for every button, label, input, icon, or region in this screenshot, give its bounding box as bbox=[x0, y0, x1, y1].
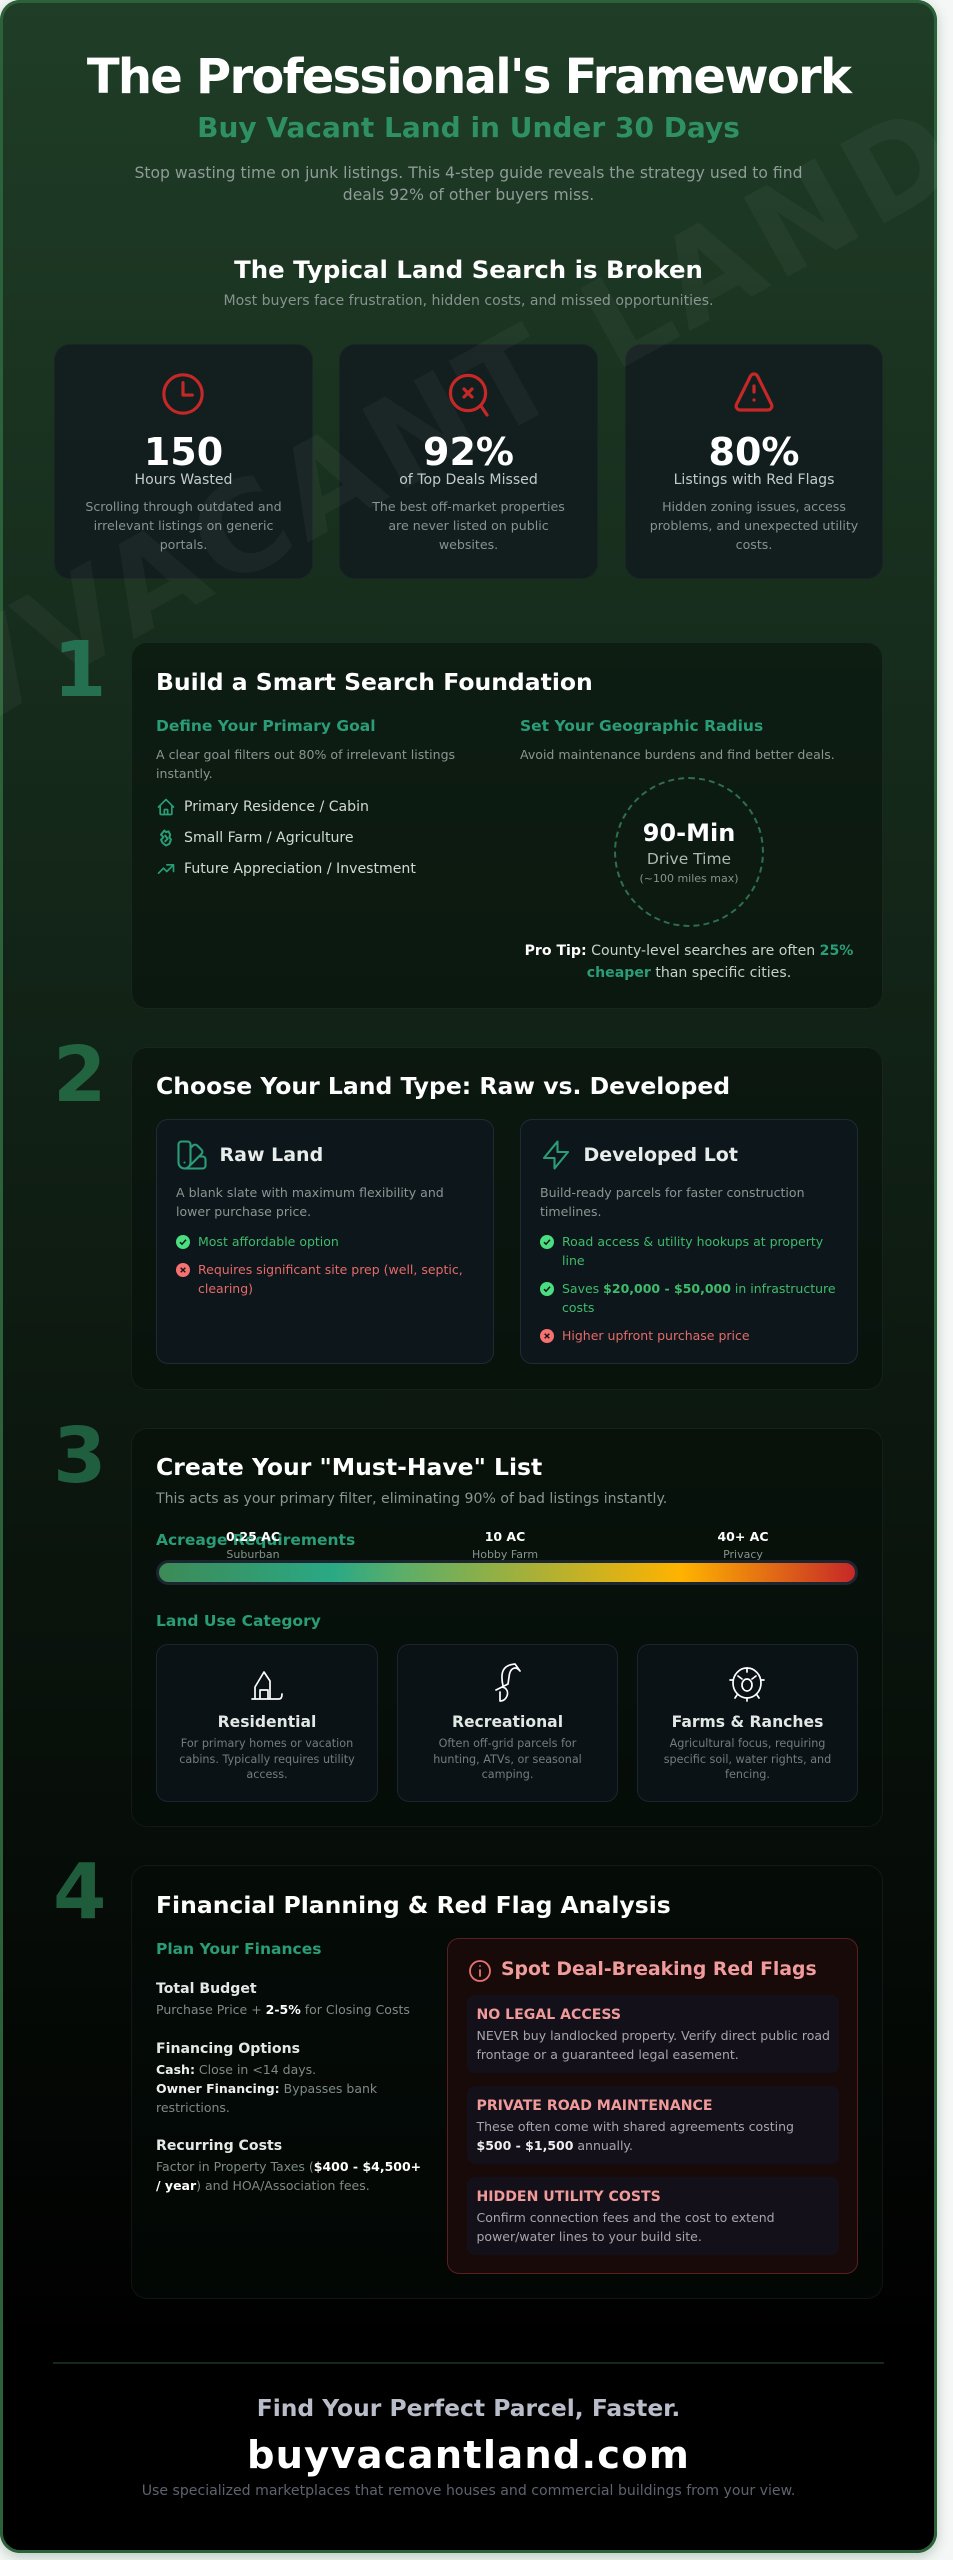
flag text: NEVER buy landlocked property. Verify direct public road bbox=[476, 2028, 830, 2042]
goal option: investment bbox=[158, 861, 416, 877]
land use heading: Land Use Category bbox=[156, 1612, 321, 1630]
pro tip bbox=[525, 943, 853, 981]
goal description: A clear goal filters out 80% of irrelevant listings bbox=[156, 747, 455, 762]
goal description: instantly. bbox=[156, 766, 213, 781]
flag title: HIDDEN UTILITY COSTS bbox=[476, 2189, 661, 2205]
con item bbox=[176, 1262, 463, 1296]
finance item: budget bbox=[131, 1980, 441, 2020]
card text: fencing. bbox=[725, 1768, 770, 1781]
card text: access. bbox=[246, 1768, 288, 1781]
flag: private road bbox=[467, 2086, 839, 2164]
icon: farm blob bbox=[160, 830, 172, 846]
con text: Requires significant site prep (well, septic, bbox=[198, 1262, 463, 1277]
pro text: Saves $20,000 - $50,000 in infrastructure bbox=[562, 1281, 836, 1296]
drive time circle bbox=[614, 777, 764, 927]
circle label: Drive Time bbox=[647, 850, 731, 868]
raw land title: Raw Land bbox=[220, 1144, 323, 1166]
item text: restrictions. bbox=[156, 2100, 230, 2114]
flag text bbox=[476, 2116, 794, 2154]
step 3 heading: Create Your "Must-Have" List bbox=[156, 1453, 542, 1481]
step 2 heading: Choose Your Land Type: Raw vs. Developed bbox=[156, 1072, 730, 1100]
option label: Primary Residence / Cabin bbox=[184, 799, 369, 815]
item text: Owner Financing: Bypasses bank bbox=[156, 2080, 377, 2096]
icon: check bbox=[540, 1235, 554, 1249]
acreage marker: hobby farm bbox=[472, 1529, 538, 1561]
card text: hunting, ATVs, or seasonal bbox=[433, 1753, 582, 1766]
stat number: 150 bbox=[144, 430, 223, 474]
developed lot description: timelines. bbox=[540, 1204, 602, 1218]
developed lot title: Developed Lot bbox=[584, 1144, 738, 1166]
finance item: financing bbox=[131, 2040, 441, 2118]
con item bbox=[540, 1328, 750, 1343]
item text bbox=[156, 2060, 377, 2116]
con text: Higher upfront purchase price bbox=[562, 1328, 750, 1343]
icon: clock bbox=[162, 373, 204, 415]
section subheading: Most buyers face frustration, hidden costs, and missed opportunities. bbox=[223, 293, 714, 309]
panel: raw land bbox=[156, 1119, 494, 1364]
icon: swatch bbox=[177, 1140, 207, 1170]
icon: hook bbox=[495, 1663, 521, 1702]
stat label: of Top Deals Missed bbox=[399, 472, 538, 488]
icon: search x bbox=[448, 374, 489, 417]
step number 1: 1 bbox=[53, 626, 106, 715]
item title: Financing Options bbox=[156, 2040, 300, 2056]
pro tip: cheaper than specific cities. bbox=[587, 965, 791, 981]
card text bbox=[637, 1736, 858, 1783]
stat number: 80% bbox=[709, 430, 799, 474]
flag text: frontage or a guaranteed legal easement. bbox=[476, 2046, 739, 2062]
item title: Total Budget bbox=[156, 1980, 257, 1996]
stat description: portals. bbox=[160, 537, 207, 552]
icon: x bbox=[540, 1329, 554, 1343]
pro text: Road access & utility hookups at property bbox=[562, 1234, 823, 1249]
option label: Small Farm / Agriculture bbox=[184, 830, 354, 846]
step 4 heading: Financial Planning & Red Flag Analysis bbox=[156, 1891, 671, 1919]
icon: warning triangle bbox=[734, 372, 774, 412]
intro text: Stop wasting time on junk listings. This 4-step guide reveals the strategy used to find bbox=[134, 164, 803, 182]
con text bbox=[198, 1262, 463, 1296]
item text: Purchase Price + 2-5% for Closing Costs bbox=[156, 2002, 410, 2016]
card title: Recreational bbox=[452, 1713, 563, 1731]
flag text: $500 - $1,500 annually. bbox=[476, 2138, 633, 2152]
card text: specific soil, water rights, and bbox=[664, 1753, 831, 1766]
intro text: deals 92% of other buyers miss. bbox=[343, 186, 594, 204]
flag text: Confirm connection fees and the cost to extend bbox=[476, 2210, 775, 2224]
circle note: (~100 miles max) bbox=[639, 872, 739, 885]
flag text: power/water lines to your build site. bbox=[476, 2228, 702, 2244]
pro text bbox=[562, 1234, 823, 1268]
stat description bbox=[372, 499, 565, 552]
marker value: 40+ AC bbox=[717, 1529, 769, 1544]
card text: Often off-grid parcels for bbox=[439, 1737, 576, 1750]
panel: recreational bbox=[397, 1644, 618, 1802]
item text bbox=[156, 2156, 421, 2194]
section heading: The Typical Land Search is Broken bbox=[234, 255, 703, 284]
stat description: problems, and unexpected utility bbox=[650, 518, 858, 533]
stat description: websites. bbox=[439, 537, 498, 552]
item text: Cash: Close in <14 days. bbox=[156, 2062, 316, 2076]
icon: target bbox=[728, 1666, 766, 1702]
raw land description: A blank slate with maximum flexibility and bbox=[176, 1184, 444, 1200]
acreage heading: Acreage Requirements bbox=[156, 1531, 355, 1549]
flag: legal access bbox=[467, 1995, 839, 2073]
footer website: buyvacantland.com bbox=[247, 2433, 690, 2478]
flag text bbox=[476, 2026, 830, 2064]
step number 3: 3 bbox=[53, 1412, 106, 1501]
panel: farms and ranches bbox=[637, 1644, 858, 1802]
panel: top deals missed bbox=[339, 344, 598, 579]
finances heading: Plan Your Finances bbox=[156, 1940, 321, 1958]
icon: check bbox=[540, 1282, 554, 1296]
stat description: are never listed on public bbox=[388, 518, 549, 533]
finance item: recurring bbox=[131, 2136, 441, 2196]
item title: Recurring Costs bbox=[156, 2138, 282, 2154]
radius description: Avoid maintenance burdens and find better deals. bbox=[520, 747, 835, 762]
pro item bbox=[540, 1281, 836, 1315]
developed lot description bbox=[540, 1184, 805, 1218]
panel: residential bbox=[156, 1644, 378, 1802]
stat description bbox=[85, 499, 282, 552]
goal description bbox=[156, 747, 455, 781]
radius heading: Set Your Geographic Radius bbox=[520, 717, 763, 735]
goal heading: Define Your Primary Goal bbox=[156, 717, 376, 735]
pro text: line bbox=[562, 1253, 585, 1268]
goal option: residence bbox=[158, 798, 369, 816]
flag title: PRIVATE ROAD MAINTENANCE bbox=[476, 2098, 712, 2114]
pro tip: Pro Tip: County-level searches are often 25% bbox=[525, 943, 853, 959]
pro text: Most affordable option bbox=[198, 1234, 339, 1249]
flag text: These often come with shared agreements costing bbox=[476, 2118, 794, 2134]
item text: Factor in Property Taxes ($400 - $4,500+ bbox=[156, 2158, 421, 2174]
panel: step 3 bbox=[131, 1428, 883, 1827]
step number 4: 4 bbox=[53, 1848, 106, 1937]
icon: lightning bolt bbox=[542, 1140, 570, 1170]
con text: clearing) bbox=[198, 1281, 253, 1296]
acreage marker: suburban bbox=[226, 1529, 280, 1561]
marker label: Privacy bbox=[723, 1548, 763, 1561]
stat description bbox=[650, 499, 858, 552]
step 1 heading: Build a Smart Search Foundation bbox=[156, 668, 593, 696]
item text: / year) and HOA/Association fees. bbox=[156, 2178, 370, 2192]
stat label: Listings with Red Flags bbox=[674, 472, 834, 488]
stat description: irrelevant listings on generic bbox=[94, 518, 273, 533]
stat description: Hidden zoning issues, access bbox=[662, 499, 846, 514]
title: The Professional's Framework bbox=[87, 49, 850, 105]
pro text bbox=[562, 1281, 836, 1315]
footer tagline: Find Your Perfect Parcel, Faster. bbox=[257, 2394, 680, 2422]
card text: For primary homes or vacation bbox=[181, 1737, 353, 1750]
flag text bbox=[476, 2208, 775, 2246]
icon: trending up bbox=[158, 864, 174, 874]
raw land description: lower purchase price. bbox=[176, 1204, 311, 1218]
goal option: farm bbox=[160, 830, 354, 846]
card title: Farms & Ranches bbox=[672, 1713, 823, 1731]
acreage marker: privacy bbox=[717, 1529, 769, 1561]
circle value: 90-Min bbox=[643, 819, 735, 847]
card text bbox=[179, 1737, 355, 1781]
panel: step 1 bbox=[131, 642, 883, 1009]
icon: cabin bbox=[251, 1671, 283, 1700]
option label: Future Appreciation / Investment bbox=[184, 861, 416, 877]
panel: red flags bbox=[447, 1938, 858, 2274]
stat label: Hours Wasted bbox=[135, 472, 232, 488]
intro text bbox=[134, 164, 803, 204]
card text: cabins. Typically requires utility bbox=[179, 1753, 355, 1766]
acreage gradient bar bbox=[156, 1560, 858, 1585]
icon: check bbox=[176, 1235, 190, 1249]
marker value: 0.25 AC bbox=[226, 1529, 280, 1544]
developed lot description: Build-ready parcels for faster construction bbox=[540, 1184, 805, 1200]
pro text: costs bbox=[562, 1300, 594, 1315]
card text bbox=[433, 1737, 582, 1781]
card text: camping. bbox=[482, 1768, 533, 1781]
flag title: NO LEGAL ACCESS bbox=[476, 2007, 621, 2023]
marker value: 10 AC bbox=[485, 1529, 525, 1544]
footer note: Use specialized marketplaces that remove houses and commercial buildings from your view. bbox=[142, 2483, 795, 2499]
panel: hours wasted bbox=[54, 344, 313, 579]
panel: developed lot bbox=[520, 1119, 858, 1364]
panel: red flag listings bbox=[625, 344, 883, 579]
flag: utilities bbox=[467, 2177, 839, 2255]
marker label: Suburban bbox=[226, 1548, 280, 1561]
subtitle: Buy Vacant Land in Under 30 Days bbox=[197, 111, 740, 144]
stat description: costs. bbox=[736, 537, 772, 552]
stat description: The best off-market properties bbox=[372, 499, 565, 514]
card title: Residential bbox=[218, 1713, 316, 1731]
step number 2: 2 bbox=[53, 1031, 106, 1120]
card text: Agricultural focus, requiring bbox=[670, 1737, 825, 1750]
red flags title: Spot Deal-Breaking Red Flags bbox=[501, 1959, 817, 1980]
panel: step 2 bbox=[131, 1047, 883, 1390]
stat number: 92% bbox=[423, 430, 514, 474]
step 3 description: This acts as your primary filter, eliminating 90% of bad listings instantly. bbox=[156, 1491, 667, 1507]
icon: house bbox=[158, 798, 174, 816]
pro item bbox=[540, 1234, 823, 1268]
stat description: Scrolling through outdated and bbox=[85, 499, 282, 514]
panel: step 4 bbox=[131, 1865, 883, 2299]
raw land description bbox=[176, 1184, 444, 1218]
icon: info bbox=[468, 1959, 492, 1983]
marker label: Hobby Farm bbox=[472, 1548, 538, 1561]
icon: x bbox=[176, 1263, 190, 1277]
pro item bbox=[176, 1234, 339, 1249]
